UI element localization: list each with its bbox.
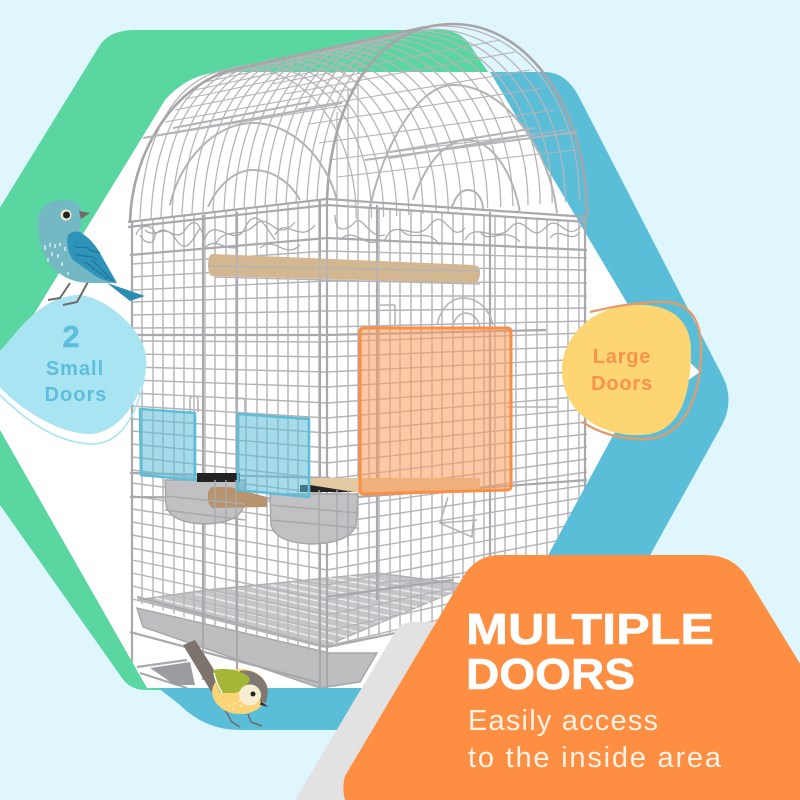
callout: 2 small doors <box>0 295 146 444</box>
body <box>38 200 117 283</box>
door hardware <box>190 298 557 583</box>
subtitle line 2: to the inside area <box>468 742 722 774</box>
small door highlight 2 <box>238 414 309 497</box>
wing <box>213 669 250 693</box>
blob fill <box>562 305 691 435</box>
title line 1: MULTIPLE <box>466 605 714 654</box>
title <box>466 605 714 699</box>
tail <box>107 283 145 301</box>
panel: blue hexagon <box>148 72 728 730</box>
icon: blue bird <box>38 200 145 305</box>
subtitle <box>468 705 722 774</box>
beak <box>260 701 268 707</box>
panel: white hexagon <box>0 72 700 688</box>
horizontal mesh <box>132 251 587 646</box>
head <box>240 671 268 703</box>
wing stripe <box>214 673 222 693</box>
callout: large doors <box>562 302 701 439</box>
lower perch dowels <box>208 487 267 508</box>
icon: yellow bird <box>183 640 268 727</box>
pupil <box>63 212 70 218</box>
large door highlight <box>360 328 511 494</box>
body <box>212 669 268 714</box>
right food bowl <box>270 485 358 544</box>
roof latch bars <box>143 102 577 160</box>
cheek <box>239 684 261 706</box>
panel: orange title shape <box>343 555 800 800</box>
eye <box>250 692 256 696</box>
frame posts and rails <box>128 199 587 695</box>
wing feather lines <box>74 246 113 281</box>
wing <box>67 231 117 283</box>
label line 2: Doors <box>591 373 653 395</box>
barrel roof arcs <box>140 24 580 219</box>
tray and floor <box>130 573 470 688</box>
belly dots <box>228 701 246 709</box>
subtitle line 1: Easily access <box>468 705 658 737</box>
number: 2 <box>62 319 80 354</box>
mesh over bowls <box>165 480 358 545</box>
label: Small <box>46 358 104 380</box>
legs <box>225 710 262 727</box>
title line 2: DOORS <box>466 650 635 699</box>
cage illustration <box>128 24 587 700</box>
lower perch <box>310 478 480 493</box>
inner door arches <box>170 85 557 213</box>
blob outline <box>0 362 146 444</box>
panel: green hexagon <box>0 30 560 690</box>
legs <box>48 282 88 305</box>
right panel vertical bars <box>336 206 580 647</box>
label: Large <box>593 346 651 368</box>
left food bowl <box>165 473 245 524</box>
small door highlight 1 <box>140 409 195 480</box>
beak <box>79 211 90 219</box>
top perch <box>208 254 480 283</box>
breast speckles <box>45 243 68 275</box>
blob outline <box>582 302 701 439</box>
eye <box>60 210 72 220</box>
left panel vertical bars <box>142 200 319 660</box>
front dome arch <box>130 24 587 222</box>
blob fill <box>0 295 146 434</box>
label line 2: Doors <box>45 384 107 406</box>
panel: gray accent shape <box>295 622 460 800</box>
decorative scrollwork <box>136 215 582 250</box>
tail <box>183 640 222 693</box>
bars over top perch <box>208 252 480 284</box>
